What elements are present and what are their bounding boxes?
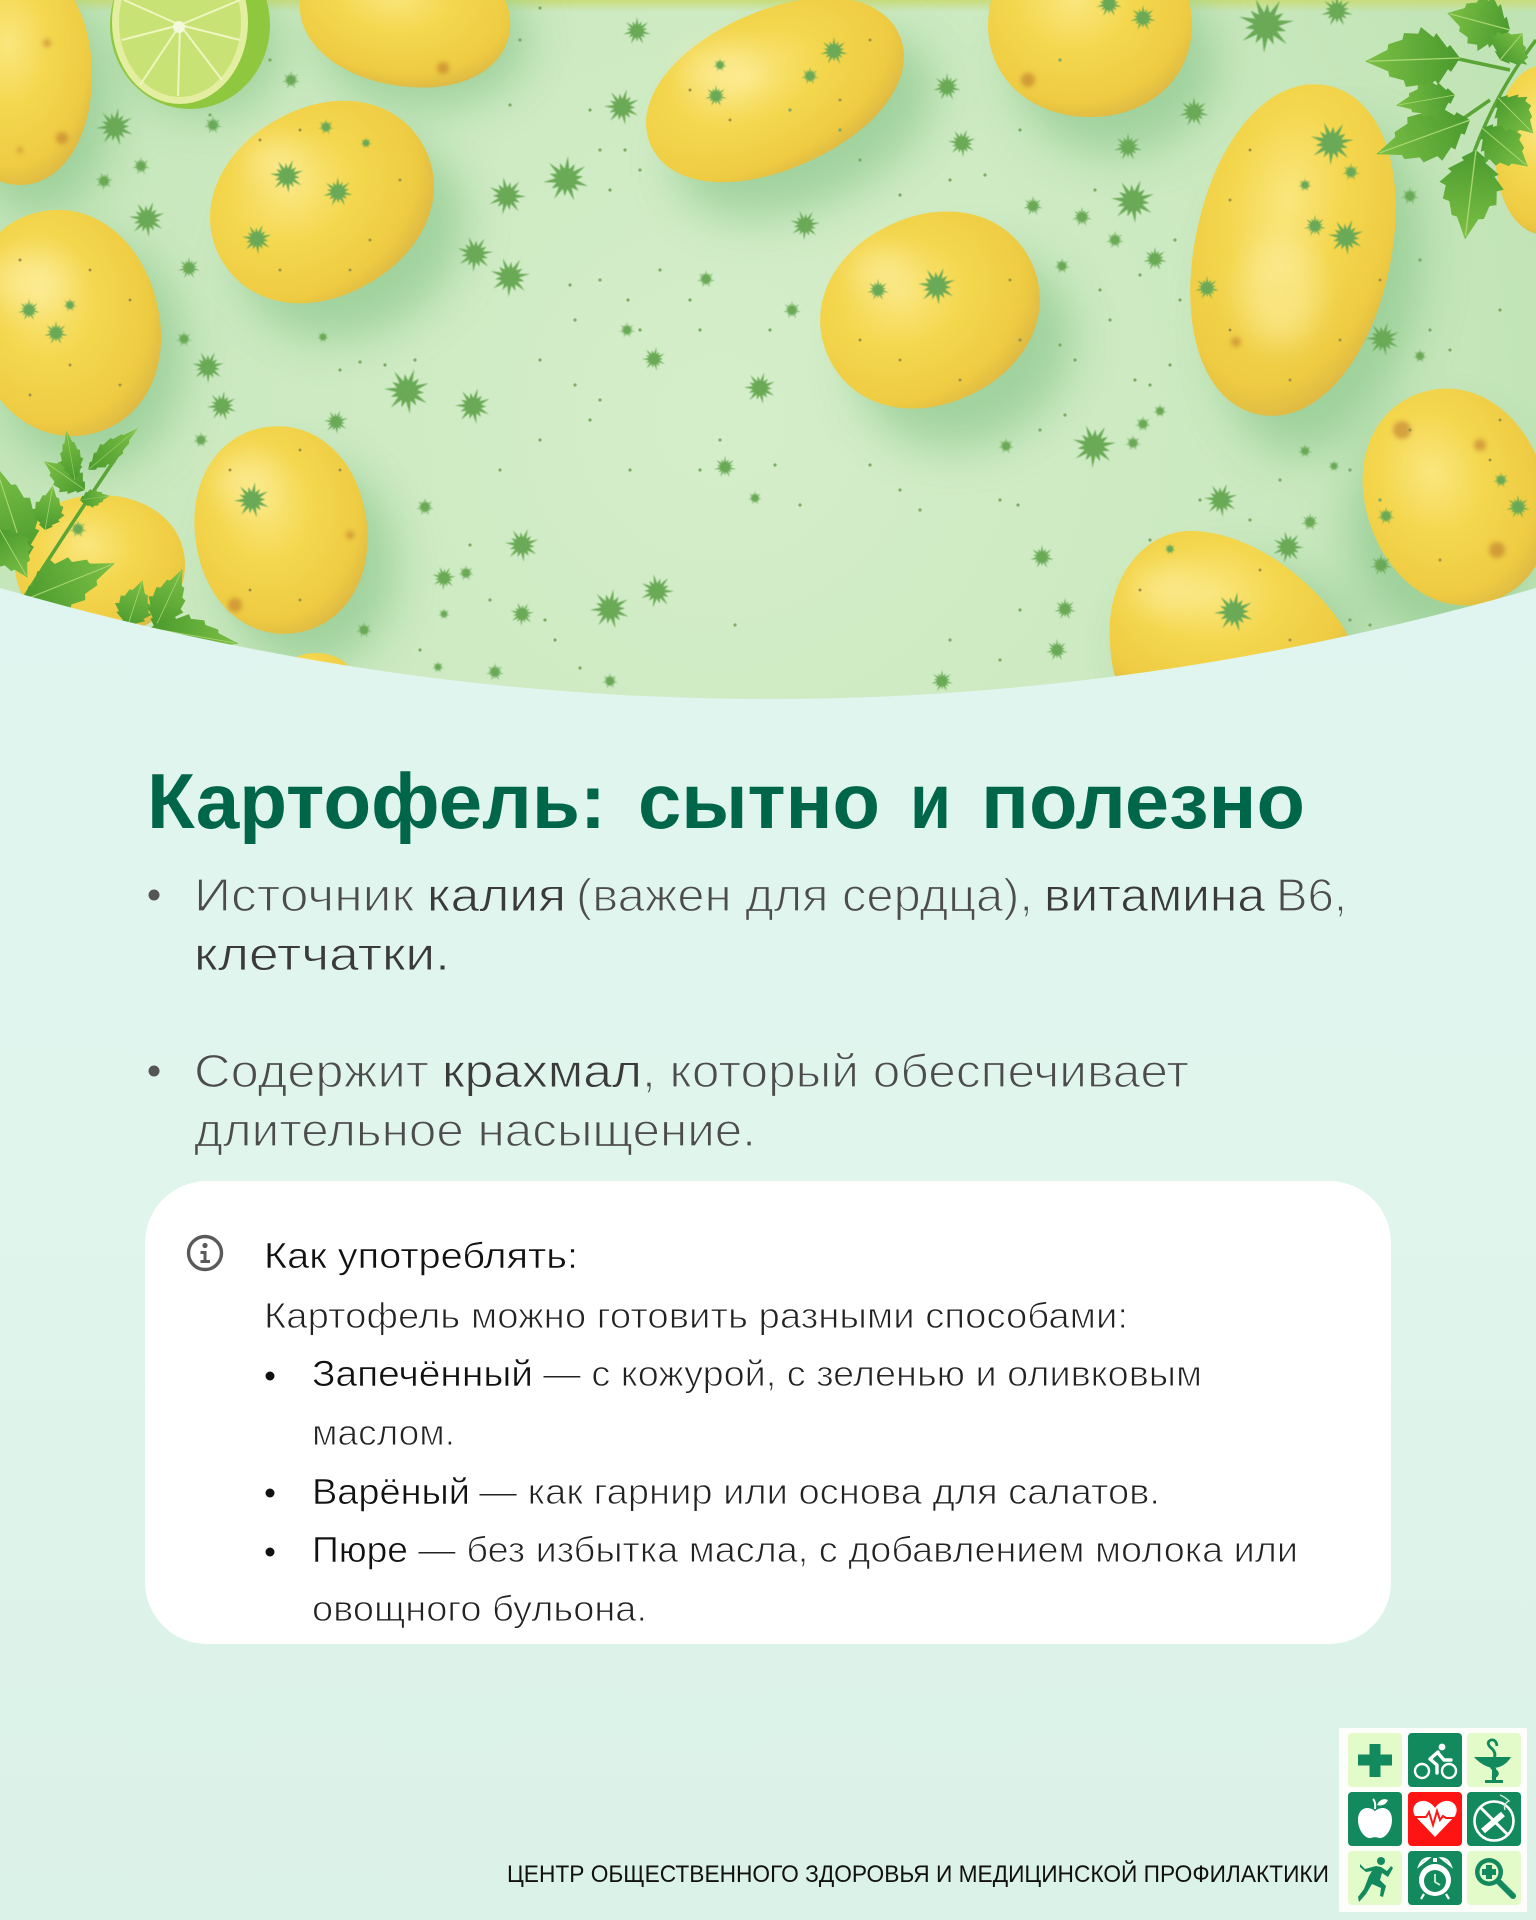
bullet 2: Содержит [194,1045,429,1097]
potatoes [0,0,1536,727]
panel: how to eat card [145,1181,1391,1644]
bullet 2: , который обеспечивает [642,1045,1189,1097]
parsley sprig: top right [1364,0,1536,243]
bullet 2 [148,1045,1189,1156]
bullet 1: В6, [1276,869,1347,921]
title: и [910,757,951,845]
photo: potatoes with herbs [0,0,1536,735]
list item: baked [266,1353,1202,1453]
parsley sprig: bottom left [0,419,242,664]
icon: no smoking [1467,1792,1521,1846]
bullet 1: клетчатки. [194,928,450,980]
list item: mash: Пюре [312,1529,408,1570]
card heading: Как употреблять: [264,1235,578,1276]
list item: baked: — с кожурой, с зеленью и оливковым [543,1353,1202,1394]
bullet 1: витамина [1044,869,1265,921]
icon: bowl of Hygieia [1467,1733,1521,1787]
card intro: Картофель можно готовить разными способами: [264,1295,1128,1336]
list item: mash: — без избытка масла, с добавлением молока или [418,1529,1298,1570]
icon: bicycle [1408,1733,1462,1787]
bullet 1: калия [427,869,566,921]
herb specks [210,8,1500,668]
icon: info [188,1236,222,1270]
icon: apple [1348,1792,1402,1846]
icon: runner [1348,1851,1402,1905]
title: полезно [981,757,1305,845]
bullet 1 [148,869,1347,980]
list item: mash [266,1529,1298,1629]
bullet 2: крахмал [442,1045,642,1097]
potato highlights [0,45,1320,612]
potato shadows [0,0,1532,735]
curved panel [0,588,1536,1920]
list item: baked: маслом. [312,1412,455,1453]
icon: heart with pulse [1408,1792,1462,1846]
icon: magnifier with plus [1467,1851,1521,1905]
list item: mash: овощного бульона. [312,1588,647,1629]
bullet 1: (важен для сердца), [576,869,1033,921]
icon: cross [1348,1733,1402,1787]
list item: boiled: — как гарнир или основа для салатов. [479,1471,1160,1512]
icon: alarm clock [1408,1851,1462,1905]
bullet 2: длительное насыщение. [194,1104,756,1156]
icon: lime half [110,0,270,109]
title: сытно [638,757,880,845]
logo: health icons grid [1339,1728,1527,1912]
list item: boiled: Варёный [312,1471,470,1512]
brown spots [17,39,1505,612]
title: Картофель: [147,757,606,845]
title [147,757,1305,845]
list item: baked: Запечённый [312,1353,533,1394]
footer organisation name: ЦЕНТР ОБЩЕСТВЕННОГО ЗДОРОВЬЯ И МЕДИЦИНСКОЙ ПРОФИЛАКТИКИ [507,1860,1329,1888]
potato speckles [20,40,1500,640]
herb flecks [18,0,1530,691]
bullet 1: Источник [194,869,415,921]
